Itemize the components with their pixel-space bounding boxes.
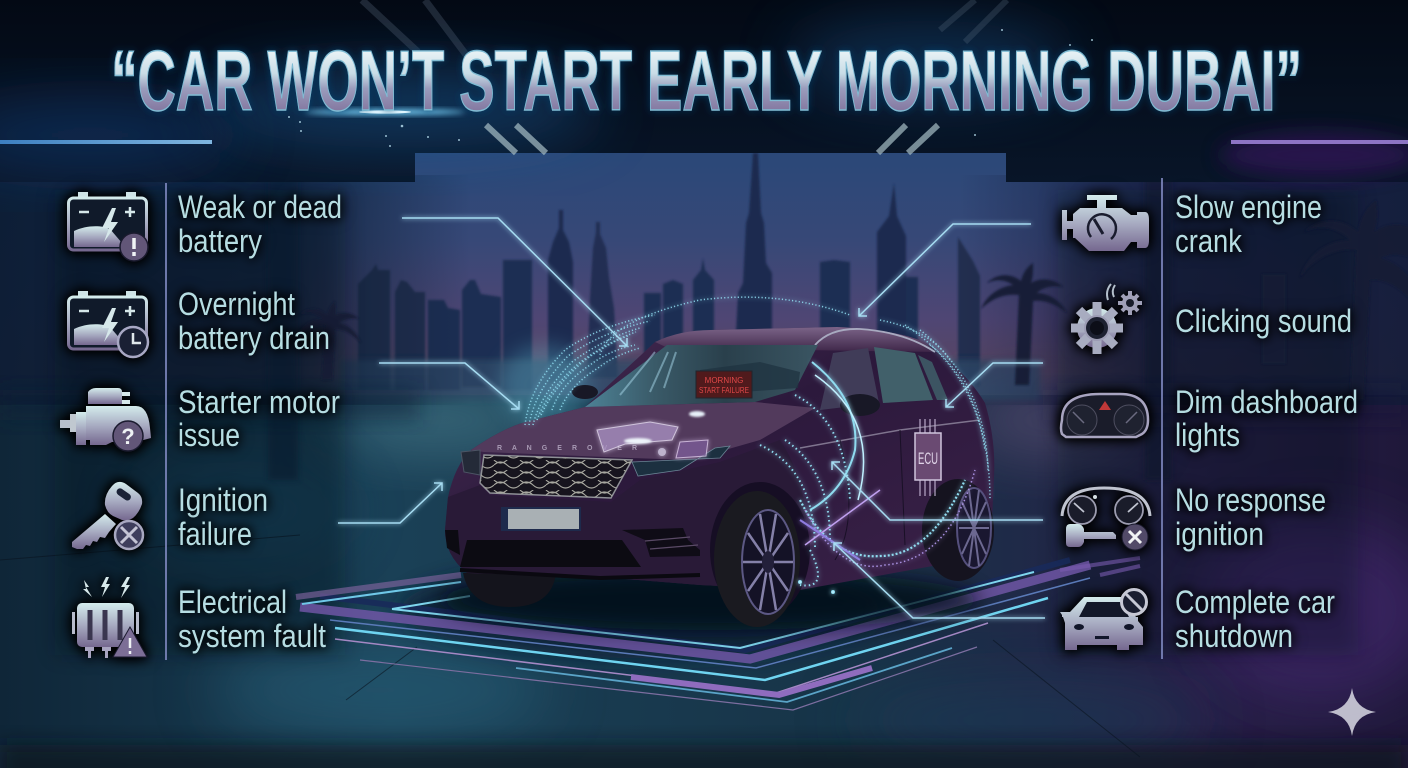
text: clicking sound: Clicking sound [1175,303,1352,339]
icon: starter motor: ? [121,424,135,449]
item: ignition failure [72,482,268,552]
text: electrical system fault [178,584,326,654]
text: dim dashboard lights: Dim dashboard [1175,384,1358,420]
headlight [461,450,480,475]
item: no response ignition [1062,482,1326,552]
text: complete car shutdown: shutdown [1175,618,1293,654]
digital swirl: hood [525,297,990,500]
item: clicking sound [1071,284,1352,354]
watermark sparkle [1328,688,1376,736]
fog lamps slats [445,530,460,555]
grille [480,455,632,498]
text: slow engine crank [1175,189,1322,259]
left panel: causes [60,189,342,658]
arrow: slow crank [859,224,1031,316]
item: overnight battery drain [68,286,330,357]
header glow right [1220,133,1408,177]
palm: right near skyline [981,263,1067,385]
dashboard sign: START FAILURE [699,386,749,395]
icon: gears [1071,284,1142,354]
text: overnight battery drain [178,286,330,356]
text: ignition failure: Ignition [178,482,268,518]
text: complete car shutdown [1175,584,1335,654]
arrow: ignition failure [338,483,442,523]
text: starter motor issue: issue [178,417,240,453]
rear wheel [922,479,994,581]
text: overnight battery drain: battery drain [178,320,330,356]
text: no response ignition: No response [1175,482,1326,518]
header glow center [790,20,1070,100]
floor seams [0,535,1140,757]
text: slow engine crank: Slow engine [1175,189,1322,225]
right panel: symptoms [1060,189,1358,654]
icon: car no symbol [1060,590,1146,650]
hood [471,402,815,460]
item: starter motor issue [60,384,340,453]
arrow: no response [832,462,1043,520]
headlamp strip [632,446,730,476]
icon: engine gauge [1062,195,1149,251]
floor haze [0,384,1408,768]
text: no response ignition: ignition [1175,516,1264,552]
lower intake [460,540,641,567]
lower body [445,440,807,590]
callout arrows [338,218,1045,618]
sparkles [288,29,1093,147]
text: slow engine crank: crank [1175,223,1243,259]
horizontal bars [0,140,212,144]
text: weak or dead battery: Weak or dead [178,189,342,225]
roof [655,327,935,352]
arrow: dim dash [946,363,1043,407]
text: weak or dead battery: battery [178,223,262,259]
header glow left [200,68,600,148]
text: starter motor issue [178,384,340,453]
car shadow [440,570,980,630]
mirror [840,394,880,416]
arrow: weak battery [402,218,627,346]
text: dim dashboard lights: lights [1175,417,1240,453]
icon: starter motor [60,388,151,451]
text: ignition failure [178,482,268,552]
floor projection: chevrons [296,558,1140,710]
text: no response ignition [1175,482,1326,552]
arrow: overnight drain [379,363,519,409]
icon: key with x [72,482,143,549]
door crease [800,420,980,448]
item: electrical system fault [72,577,326,658]
item: dim dashboard lights [1061,384,1358,453]
dividers [166,178,1162,660]
icon: dashboard key x [1062,488,1150,550]
ceiling header [0,0,1408,182]
digital swirl: wheel [760,362,975,594]
item: weak or dead battery [68,189,342,261]
car [440,297,994,630]
hood brand: R A N G E R O V E R [497,445,637,452]
text: dim dashboard lights [1175,384,1358,453]
floor [0,395,1408,768]
body [445,327,994,590]
bumper lip [460,570,700,578]
side windows [820,347,948,410]
sky window [0,150,1408,410]
front left wheel [463,573,556,607]
front wheel [714,491,800,627]
text: starter motor issue: Starter motor [178,384,340,420]
dashboard sign [696,371,752,398]
palm: left [295,301,361,380]
icon: battery clock [68,291,148,357]
item: complete car shutdown [1060,584,1335,654]
dubai skyline [340,153,1040,400]
front wheel arch [710,482,810,618]
icon: battery alert [68,192,148,261]
item: slow engine crank [1062,189,1322,259]
palm: right large [1300,200,1408,400]
ECU chip: ECU [918,449,938,468]
seats [700,362,800,395]
icon: dashboard [1061,394,1148,437]
text: electrical system fault: system fault [178,618,326,654]
dim side panels [0,150,1408,655]
dashboard sign: MORNING [705,376,743,385]
text: overnight battery drain: Overnight [178,286,295,322]
hood highlight [689,411,705,417]
teal aura [500,345,590,425]
license plate [501,507,581,531]
icon: fuse box warning [72,577,147,658]
engine hologram [597,422,708,458]
windshield [585,345,818,407]
text: electrical system fault: Electrical [178,584,287,620]
text: ignition failure: failure [178,516,252,552]
palm trees [295,200,1408,400]
arrow: shutdown [834,543,1045,618]
text: complete car shutdown: Complete car [1175,584,1335,620]
ceiling light strips [362,0,1007,153]
text: weak or dead battery [178,189,342,259]
ECU chip [915,419,941,496]
side vents [622,528,700,557]
